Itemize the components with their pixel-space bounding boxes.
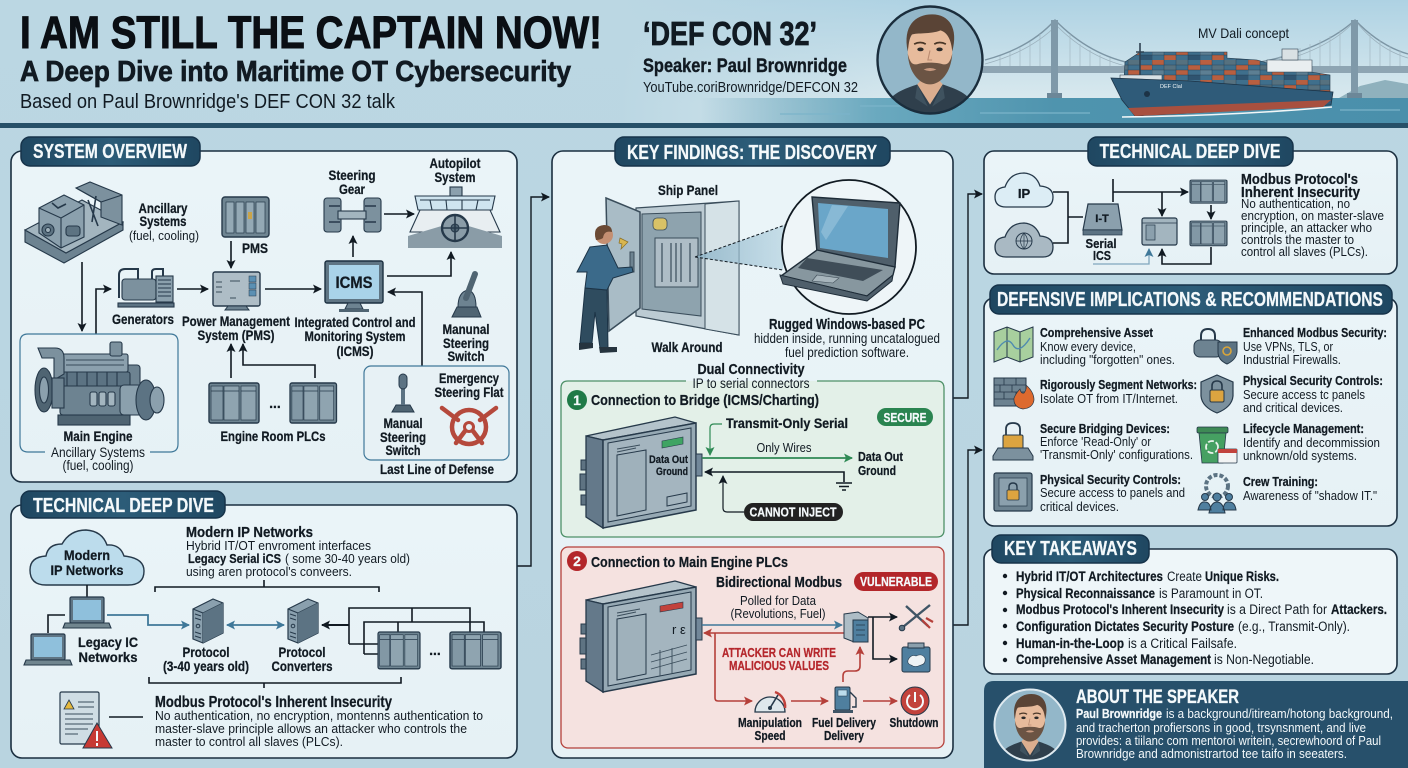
box: emergency steering flat [364, 366, 509, 460]
icon: recycling bin [1197, 427, 1237, 463]
label: dual connectivity [692, 362, 810, 391]
label: polled for data: (Revolutions, Fuel) [730, 606, 826, 621]
video link: YouTube.coriBrownridge/DEFCON 32 [643, 79, 858, 96]
label: ship panel: Ship Panel [658, 182, 718, 198]
text: modbus insecurity: Modbus Protocol's Inherent Insecurity [155, 694, 392, 711]
icon: plc racks [1190, 180, 1227, 246]
label: pms: PMS [242, 241, 268, 256]
icon: master controller [1142, 218, 1177, 245]
icon: autopilot bridge [408, 187, 502, 248]
label: only wires: Only Wires [756, 440, 812, 455]
icon: network cloud: Modern [64, 547, 110, 563]
heading: technical deep dive: TECHNICAL DEEP DIVE [33, 495, 214, 517]
scene: bridge and ship: DEF Clal [1160, 84, 1182, 90]
panel: key findings [552, 137, 953, 758]
icon: network cloud [30, 530, 144, 585]
heading: technical deep dive right: TECHNICAL DEEP DIVE [1100, 141, 1280, 163]
badge: number one: 1 [573, 392, 581, 408]
heading: key findings: KEY FINDINGS: THE DISCOVERY [627, 142, 878, 164]
icon: small lever [392, 374, 414, 412]
takeaway list [1003, 569, 1387, 667]
box: main engine [20, 334, 178, 473]
icon: shutdown [901, 687, 929, 715]
text: modbus insecurity: encryption, on master-slave [1241, 208, 1384, 223]
speaker portrait small [994, 689, 1066, 761]
panel: technical deep dive left [11, 491, 517, 758]
icon: ip cloud [995, 173, 1053, 207]
label: autopilot system: System [434, 170, 476, 185]
label: legacy ic networks: Legacy IC [78, 634, 138, 650]
badge: number one [567, 390, 587, 410]
item: physical security left: critical devices. [1040, 499, 1119, 514]
text: modern ip networks: Hybrid IT/OT envroment interfaces [186, 538, 371, 553]
label: manual steering switch: Steering [443, 336, 489, 351]
icon: main engine [35, 342, 164, 425]
badge: cannot inject: CANNOT INJECT [750, 504, 837, 520]
label: data out ground: Ground [858, 463, 896, 478]
label: manual steering switch inner: Steering [380, 430, 426, 445]
label: power management system: Power Management [182, 313, 290, 329]
item: physical security right: Secure access tc panels [1243, 387, 1365, 402]
icon: shield padlock [1201, 375, 1233, 413]
labels: attack outcomes: Delivery [824, 729, 864, 743]
label: legacy ic networks [78, 634, 138, 665]
item: comprehensive asset: including "forgotten" ones. [1040, 352, 1175, 367]
takeaway list: Comprehensive Asset Management [1016, 652, 1211, 667]
text: modbus insecurity: Inherent Insecurity [1241, 185, 1360, 201]
icon: safe [994, 473, 1032, 511]
label: manual steering switch: Switch [448, 349, 484, 364]
speaker portrait [877, 6, 983, 114]
text: modern ip networks: ( some 30-40 years old) [285, 551, 410, 566]
label: main engine: Main Engine [64, 428, 133, 444]
text: modbus insecurity [1241, 172, 1384, 259]
badge: vulnerable: VULNERABLE [860, 574, 932, 589]
item: enhanced modbus security [1194, 325, 1387, 367]
icon: technician [577, 225, 633, 353]
heading: system overview: SYSTEM OVERVIEW [33, 141, 187, 163]
icon: ip cloud: IP [1018, 186, 1030, 201]
text: modbus insecurity: controls the master to [1241, 232, 1354, 247]
item: lifecycle management: unknown/old systems. [1243, 448, 1357, 463]
label: generators: Generators [112, 311, 174, 327]
icon: serial device: Data Out [649, 454, 688, 466]
icon: engine room plcs [209, 383, 336, 423]
speaker bio: Brownridge and admonistrartod tee taifo in seeaters. [1076, 746, 1347, 761]
item: bridging devices: 'Transmit-Only' configurations. [1040, 447, 1193, 462]
label: last line of defense: Last Line of Defense [380, 462, 494, 477]
icon: laptops [24, 597, 111, 665]
label: transmit-only serial [710, 415, 848, 455]
label: protocol converters: Converters [272, 658, 333, 674]
label: emergency steering flat [434, 371, 504, 400]
item: crew training: Crew Training: [1243, 474, 1318, 489]
title: I AM STILL THE CAPTAIN NOW! [20, 7, 602, 58]
text: attacker can write: ATTACKER CAN WRITE [722, 645, 836, 660]
takeaway list: (e.g., Transmit-Only). [1238, 619, 1350, 634]
item: lifecycle management [1197, 421, 1380, 463]
speaker bio: Paul Brownridge [1076, 706, 1162, 721]
icon: fuel pump [833, 687, 856, 713]
panel: defensive implications [984, 285, 1397, 526]
icon: internet cloud [995, 223, 1053, 257]
takeaway list: is Non-Negotiable. [1214, 652, 1314, 667]
icon: firewall [994, 378, 1034, 409]
label: serial ics: ICS [1093, 248, 1111, 263]
labels: attack outcomes: Fuel Delivery [812, 716, 876, 730]
labels: attack outcomes: Shutdown [890, 716, 938, 730]
item: comprehensive asset: Comprehensive Asset [1040, 325, 1154, 340]
icon: lock and shield [1194, 329, 1237, 364]
label: integrated control and monitoring system [294, 314, 416, 359]
label: serial ics [1086, 236, 1116, 263]
label: ancillary systems: (fuel, cooling) [129, 228, 199, 243]
icon: network cloud: IP Networks [50, 562, 124, 578]
arrows: system flow [82, 214, 451, 378]
subtitle: A Deep Dive into Maritime OT Cybersecurity [20, 56, 571, 88]
icon: ship panel cabinet [606, 198, 739, 335]
heading: key findings [615, 137, 890, 166]
takeaway list: Configuration Dictates Security Posture [1016, 619, 1234, 634]
label: dual connectivity: Dual Connectivity [698, 362, 804, 378]
text: modbus insecurity: master to control all slaves (PLCs). [155, 734, 343, 749]
heading: key takeaways [992, 535, 1149, 563]
takeaway list: Attackers. [1331, 602, 1387, 617]
label: integrated control and monitoring system: Integrated Control and [294, 314, 416, 330]
label: emergency steering flat: Steering Flat [434, 385, 504, 400]
text: modbus insecurity: Modbus Protocol's [1241, 172, 1358, 188]
text: modbus insecurity: principle, an attacker who [1241, 220, 1372, 235]
badge: vulnerable [854, 572, 938, 591]
heading: system overview [21, 137, 200, 166]
icon: generator [118, 269, 174, 307]
icon: document warning [60, 692, 143, 748]
icon: tools [899, 605, 933, 631]
icon: icms monitor [325, 261, 383, 312]
heading: technical deep dive right [1088, 137, 1293, 166]
label: rugged windows pc [754, 317, 940, 360]
item: physical security left: Secure access to panels and [1040, 485, 1185, 500]
item: physical security right: Physical Security Controls: [1243, 373, 1383, 388]
heading: technical deep dive [21, 491, 225, 518]
network links [48, 585, 484, 654]
takeaway list: Human-in-the-Loop [1016, 636, 1124, 651]
item: lifecycle management: Identify and decommission [1243, 435, 1380, 450]
label: rugged windows pc: fuel prediction software. [785, 345, 909, 360]
panel: about the speaker [984, 681, 1408, 768]
heading: key takeaways: KEY TAKEAWAYS [1004, 538, 1137, 560]
item: bridging devices: Secure Bridging Devices: [1040, 421, 1170, 436]
icon: steering gear [324, 198, 381, 232]
label: rugged windows pc: hidden inside, running uncatalogued [754, 331, 940, 346]
label: integrated control and monitoring system: Monitoring System [304, 328, 406, 344]
wires: data and ground [702, 458, 852, 512]
takeaway list: Unique Risks. [1205, 569, 1279, 584]
label: main engine [51, 428, 145, 473]
icon: plc racks: ... [429, 642, 441, 658]
icon: padlock router [993, 423, 1033, 460]
label: data out ground [858, 449, 904, 478]
source line: Based on Paul Brownridge's DEF CON 32 talk [20, 91, 396, 113]
conference name: ‘DEF CON 32’ [643, 15, 817, 52]
icon: speed gauge [755, 692, 785, 712]
label: walk around: Walk Around [652, 339, 722, 355]
icon: serial gateway: I-T [1095, 213, 1109, 225]
takeaway list: is a Direct Path for [1227, 602, 1327, 617]
label: protocol: (3-40 years old) [163, 658, 249, 674]
panel: system overview [11, 137, 517, 482]
label: power management system [182, 313, 290, 343]
label: ancillary systems: Ancillary [138, 201, 188, 216]
label: steering gear: Steering [328, 168, 376, 183]
icon: crew and gear [1198, 475, 1236, 513]
icon: icms monitor: ICMS [336, 273, 372, 292]
label: manual steering switch [442, 322, 490, 364]
takeaway list: is Paramount in OT. [1159, 586, 1263, 601]
data flow arrows [702, 617, 897, 701]
label: polled for data: Polled for Data [740, 593, 817, 608]
takeaway list: Hybrid IT/OT Architectures [1016, 569, 1163, 584]
labels: attack outcomes: Speed [754, 729, 786, 743]
label: serial ics: Serial [1086, 236, 1116, 251]
text: attacker can write: MALICIOUS VALUES [729, 658, 829, 673]
box: connection to bridge (secure) [561, 381, 944, 537]
icon: plc device: r ε [672, 622, 686, 637]
label: power management system: System (PMS) [198, 327, 274, 343]
icon: rugged laptop [780, 180, 916, 314]
icon: plc device [580, 581, 702, 692]
label: main engine: (fuel, cooling) [62, 458, 134, 473]
icon: ancillary machinery [25, 182, 123, 263]
item: comprehensive asset [994, 325, 1175, 367]
label: engine room plcs: Engine Room PLCs [220, 428, 326, 444]
label: legacy ic networks: Networks [78, 649, 138, 665]
panel: technical deep dive right [984, 137, 1397, 274]
text: modbus insecurity: control all slaves (PLCs). [1241, 244, 1368, 259]
label: ancillary systems [129, 201, 199, 243]
zoom beam [695, 225, 785, 270]
links [1053, 179, 1211, 264]
label: emergency steering flat: Emergency [439, 371, 499, 386]
text: modern ip networks: Modern IP Networks [186, 524, 313, 541]
label: protocol: Protocol [182, 644, 230, 660]
icon: engine room plcs: ... [269, 395, 281, 411]
label: protocol converters [272, 644, 333, 674]
text: modern ip networks: using aren protocol's conveers. [186, 564, 352, 579]
label: steering gear: Gear [339, 182, 366, 197]
takeaway list: is a Critical Failsafe. [1128, 636, 1237, 651]
text: modern ip networks [186, 524, 410, 579]
scene: bridge and ship [700, 20, 1408, 123]
badge: secure: SECURE [884, 410, 927, 425]
item: enhanced modbus security: Industrial Firewalls. [1243, 352, 1341, 367]
text: modbus insecurity: master-slave principle allows an attacker who controls the [155, 721, 467, 736]
item: crew training: Awareness of "shadow IT." [1243, 488, 1377, 503]
text: attacker can write [722, 645, 836, 673]
label: rugged windows pc: Rugged Windows-based PC [769, 317, 925, 333]
icon: serial device [580, 417, 702, 528]
speaker bio [1076, 706, 1393, 761]
icon: manual steering lever [452, 274, 481, 317]
box: connection to engine plcs (vulnerable) [561, 547, 944, 748]
icon: plc racks [378, 632, 501, 669]
label: protocol converters: Protocol [278, 644, 326, 660]
label: manual steering switch inner [380, 416, 426, 458]
connector arrows between columns [517, 194, 982, 625]
heading: connection to bridge: Connection to Bridge (ICMS/Charting) [591, 392, 819, 409]
label: main engine: Ancillary Systems [51, 445, 145, 460]
label: dual connectivity: IP to serial connectors [692, 376, 810, 391]
icon: battery [902, 643, 930, 672]
ship caption: MV Dali concept [1198, 25, 1289, 41]
icon: emergency wheel [442, 408, 496, 444]
label: autopilot system [430, 156, 481, 185]
item: segment networks: Isolate OT from IT/Internet. [1040, 391, 1178, 406]
text: modbus insecurity: No authentication, no encryption, montenns authentication to [155, 708, 483, 723]
panel: key takeaways [984, 535, 1397, 674]
item: bridging devices [993, 421, 1193, 462]
icon: serial gateway [1083, 204, 1122, 235]
item: enhanced modbus security: Use VPNs, TLS, or [1243, 339, 1334, 354]
label: protocol [163, 644, 249, 674]
item: segment networks: Rigorously Segment Networks: [1040, 377, 1197, 392]
item: physical security right [1201, 373, 1383, 415]
item: bridging devices: Enforce 'Read-Only' or [1040, 434, 1152, 449]
speaker bio: and tracherton profiersons in good, trsynsnment, and live [1076, 720, 1366, 735]
labels: attack outcomes [738, 716, 938, 743]
label: polled for data [730, 593, 826, 621]
label: integrated control and monitoring system: (ICMS) [336, 343, 374, 359]
text: modern ip networks: Legacy Serial iCS [188, 551, 281, 566]
heading: about the speaker: ABOUT THE SPEAKER [1076, 687, 1239, 708]
icon: pms monitor [213, 272, 260, 310]
label: manual steering switch inner: Manual [384, 416, 422, 431]
label: transmit-only serial: Transmit-Only Serial [726, 415, 848, 431]
item: lifecycle management: Lifecycle Management: [1243, 421, 1364, 436]
icon: pms rack [222, 197, 269, 237]
icon: map [994, 327, 1033, 362]
item: comprehensive asset: Know every device, [1040, 339, 1136, 354]
icon: protocol servers [193, 599, 318, 643]
item: physical security left: Physical Security Controls: [1040, 472, 1181, 487]
header banner [0, 0, 1408, 128]
item: crew training [1198, 474, 1377, 513]
labels: attack outcomes: Manipulation [738, 716, 802, 730]
item: segment networks [994, 377, 1197, 409]
icon: serial device: Ground [656, 466, 688, 478]
label: ancillary systems: Systems [140, 214, 186, 229]
icon: register documents [844, 612, 868, 642]
label: data out ground: Data Out [858, 449, 904, 464]
takeaway list: Physical Reconnaissance [1016, 586, 1155, 601]
item: physical security left [994, 472, 1185, 514]
item: physical security right: and critical devices. [1243, 400, 1343, 415]
label: bidirectional modbus: Bidirectional Modbus [716, 574, 842, 591]
takeaway list: Modbus Protocol's Inherent Insecurity [1016, 602, 1224, 617]
label: steering gear [328, 168, 376, 197]
heading: connection to main engine plcs: Connection to Main Engine PLCs [591, 554, 788, 571]
badge: number two: 2 [573, 553, 581, 569]
badge: number two [567, 551, 587, 571]
badge: secure [877, 408, 933, 426]
speaker name: Speaker: Paul Brownridge [643, 56, 847, 77]
label: manual steering switch: Manunal [442, 322, 490, 337]
text: modbus insecurity: No authentication, no [1241, 196, 1350, 211]
label: manual steering switch inner: Switch [386, 443, 420, 458]
text: modbus insecurity [155, 694, 483, 749]
takeaway list: Create [1167, 569, 1202, 584]
label: autopilot system: Autopilot [430, 156, 481, 171]
